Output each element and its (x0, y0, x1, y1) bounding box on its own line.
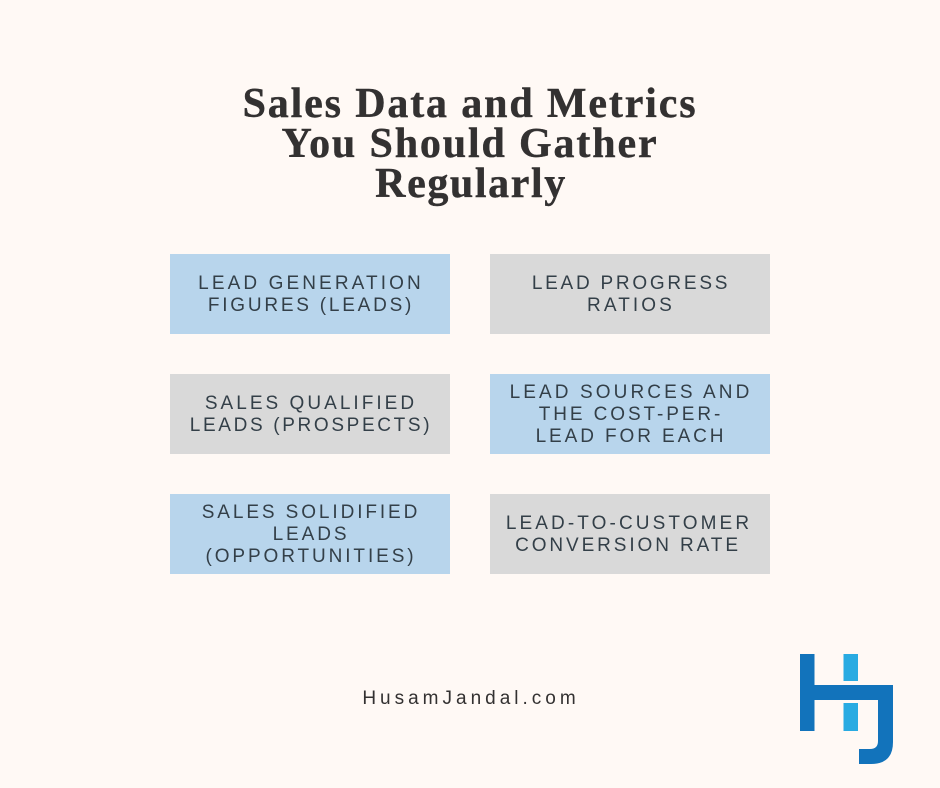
panel: lead generation figures: FIGURES (LEADS) (208, 295, 414, 316)
panel: lead-to-customer conversion rate: LEAD-TO-CUSTOMER (506, 513, 752, 534)
title: Regularly (375, 161, 567, 207)
panel: sales qualified leads (170, 374, 450, 454)
website footer: HusamJandal.com (362, 688, 580, 709)
title: Sales Data and Metrics (243, 81, 697, 127)
panel: sales solidified leads (170, 494, 450, 574)
panel: lead progress ratios: RATIOS (587, 295, 675, 316)
panel: sales qualified leads: SALES QUALIFIED (205, 393, 417, 414)
panel: lead progress ratios (490, 254, 770, 334)
panel: sales qualified leads: LEADS (PROSPECTS) (190, 415, 432, 436)
panel: lead sources and cost per lead: THE COST-PER- (539, 404, 723, 425)
panel: lead generation figures (170, 254, 450, 334)
panel: sales solidified leads: SALES SOLIDIFIED (202, 502, 420, 523)
panel: lead generation figures: LEAD GENERATION (198, 273, 424, 294)
panel: lead sources and cost per lead (490, 374, 770, 454)
panel: sales solidified leads: LEADS (273, 524, 349, 545)
panel: lead sources and cost per lead: LEAD FOR EACH (536, 426, 726, 447)
panel: lead sources and cost per lead: LEAD SOURCES AND (510, 382, 752, 403)
panel: lead-to-customer conversion rate: CONVERSION RATE (515, 535, 741, 556)
panel: sales solidified leads: (OPPORTUNITIES) (206, 546, 416, 567)
title (243, 81, 697, 207)
title: You Should Gather (282, 121, 658, 167)
panel: lead progress ratios: LEAD PROGRESS (532, 273, 730, 294)
panel: lead-to-customer conversion rate (490, 494, 770, 574)
icon: HJ logo (800, 654, 893, 764)
